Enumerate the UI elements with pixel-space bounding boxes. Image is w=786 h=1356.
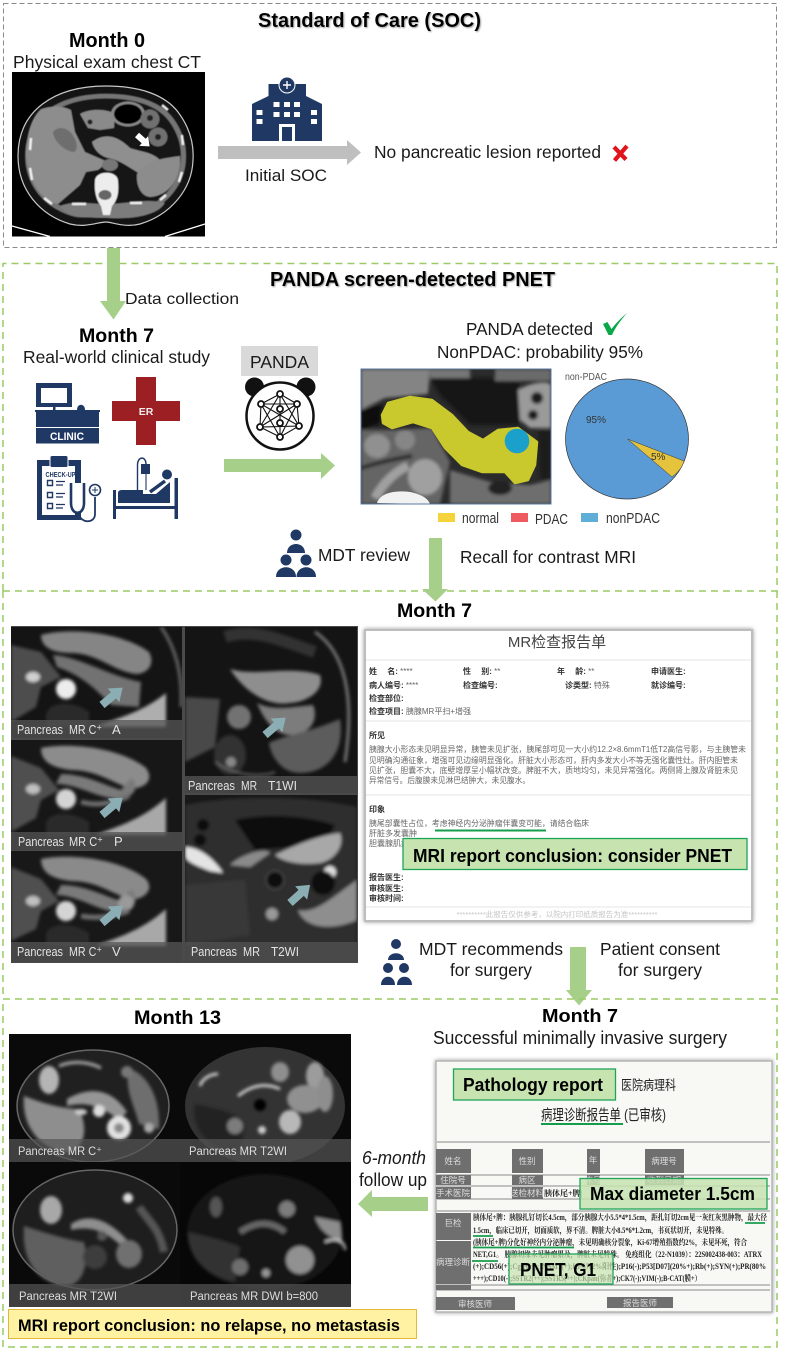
arrow: to surgery [566,947,592,1006]
table: patient info: 病理号 [651,1156,677,1166]
image: MRI T1WI: Pancreas [188,778,235,793]
arrow: to PANDA result [224,453,335,479]
heading: month 7: Month 7 [79,325,154,347]
report: MR report sheet: 胰腺大小形态未见明显异常，胰管未见扩张，胰尾部可见一大小约12.2×8.6mmT1低T2高信号影，与主胰管未 [369,744,746,754]
table: patient info: 巨检 [444,1218,462,1228]
text: physical exam chest CT: Physical exam chest CT [13,52,201,72]
report: MR report sheet: 见明确沟通征象，增强可见边缘明显强化。肝脏大小形态可，肝内多发大小不等无强化囊性灶。肝内胆管未 [369,755,738,765]
report: MR report sheet: MR检查报告单 [508,634,606,651]
legend: segmentation classes: PDAC [535,512,568,528]
text: patient consent for surgery: Patient consent [600,939,720,959]
callout: pathology report: Pathology report [463,1075,603,1095]
report: MR report sheet: 申请医生: [651,666,686,676]
image: follow-up MR T2WI top: Pancreas MR T2WI [189,1146,287,1158]
image: MRI portal phase [11,740,182,849]
text: initial SOC: Initial SOC [245,167,327,185]
image: MRI T1WI [185,627,357,793]
image: follow-up MR contrast [9,1049,180,1162]
image: MRI T1WI: T1WI [268,778,297,793]
callout: PNET G1 [509,1254,613,1284]
callout: pathology report [454,1069,616,1100]
report: MR report sheet: 胆囊腺肌症可能大 [369,838,433,848]
icon: MDT team recommends [381,939,412,985]
image: MRI T2WI [185,795,357,959]
image: segmented CT [361,369,551,504]
image: MRI portal phase: MR C⁺ [69,834,103,849]
callout: consider PNET: MRI report conclusion: consider PNET [413,846,732,866]
table: patient info [436,1142,770,1310]
callout: PNET G1: PNET, G1 [520,1260,596,1280]
callout: no relapse no metastasis [8,1310,416,1338]
image: MRI T2WI: MR [243,944,260,959]
icon: green check [603,313,627,335]
chart: probability pie: non-PDAC [565,372,607,383]
report: pathology report [436,1061,772,1312]
arrow: follow up [358,1190,428,1217]
table: patient info: 审核医师 [458,1299,492,1309]
chart: probability pie: 5% [651,452,666,463]
text: recall for contrast MRI: Recall for contrast MRI [460,547,636,567]
text: pathology body: +++);CD10(-);SSTR2(++);SSTR5(++);CKpan(弥者+);CK7(-);VIM(-);B-CAT(膜+） [473,1273,701,1283]
icon: check-up clipboard: CHECK-UP [46,472,76,479]
legend: segmentation classes: normal [462,511,499,527]
icon: clinic [35,383,100,444]
text: pathology body: 1.5cm，临床已切开，切面质软，界不清。脾脏大小8.5*6*1.2cm，书页状切开，未见特殊。 [473,1225,728,1236]
heading: PANDA screen-detected PNET: PANDA screen-detected PNET [270,268,555,291]
text: MDT recommends for surgery: for surgery [450,960,532,980]
panel: standard of care [4,4,776,248]
report: MR report sheet: 见扩张，胆囊不大，底壁增厚呈小幅状改变。脾脏不大，质地均匀，未见异常强化。两侧肾上腺及肾脏未见 [369,765,738,775]
panel: PANDA screen-detected PNET [3,248,777,999]
text: pathology body [472,1212,768,1283]
report: MR report sheet: 检查编号: [463,680,498,690]
icon: emergency room cross: ER [139,406,154,418]
table: patient info: 胰体尾+脾| [544,1188,583,1198]
text: no pancreatic lesion reported: No pancreatic lesion reported [374,142,601,162]
text: department: 医院病理科 [621,1078,676,1093]
report: MR report sheet: 检查项目: 胰腺MR平扫+增强 [369,706,471,716]
report: MR report sheet: 审核医生: [369,883,404,893]
text: MDT review: MDT review [318,545,410,565]
report: MR report sheet: 诊类型: 特殊 [565,680,610,690]
heading: month 0: Month 0 [69,30,145,52]
text: successful surgery: Successful minimally invasive surgery [433,1028,727,1048]
text: six month follow up [359,1148,427,1190]
text: real-world clinical study: Real-world clinical study [23,347,210,367]
icon: hospital [252,77,322,141]
callout: consider PNET [403,838,747,870]
label: PANDA model [241,346,318,376]
text: patient consent for surgery [600,939,720,980]
image: follow-up MR DWI: Pancreas MR DWI b=800 [190,1291,318,1303]
panel: month 7 MRI [11,601,752,1006]
report: MR report sheet: **********此报告仅供参考，以院内打印纸质报告为准********** [457,909,658,919]
arrow: recall [422,538,448,602]
report: MR report sheet: 姓 名: **** [369,666,413,676]
table: patient info: 病区 [518,1175,536,1185]
arrow: data collection [100,248,126,320]
chart: probability pie [565,372,688,499]
report: MR report sheet: 审核时间: [369,893,404,903]
icon: clinic: CLINIC [50,431,84,443]
heading: month 13: Month 13 [134,1008,221,1029]
chart: probability pie: 95% [586,415,606,426]
image: MRI portal phase: Pancreas [18,834,64,849]
image: follow-up MRI grid [9,1034,351,1307]
image: MRI arterial phase: A [112,722,121,737]
image: MRI arterial phase [11,627,182,737]
icon: emergency room cross [112,377,180,445]
legend: segmentation classes [438,511,660,528]
callout: max diameter: Max diameter 1.5cm [590,1184,755,1204]
table: patient info: 住院号 [440,1175,466,1185]
report: MR report sheet: 所见 [369,730,385,740]
table: patient info: 收到日期 [647,1175,681,1185]
text: MDT recommends for surgery [419,939,563,980]
image: follow-up MR contrast: Pancreas MR C⁺ [18,1146,102,1158]
icon: check-up clipboard [37,456,100,521]
report: MR report sheet: 病人编号: **** [369,680,418,690]
callout: no relapse no metastasis: MRI report conclusion: no relapse, no metastasis [18,1316,400,1335]
panel: surgery and follow-up [3,999,777,1347]
report: MR report sheet: 性 别: ** [463,666,500,676]
report: MR report sheet [365,630,752,921]
text: MDT recommends for surgery: MDT recommends [419,939,563,959]
report: MR report sheet: 肝脏多发囊肿 [369,828,417,838]
image: MRI arterial phase: MR C⁺ [69,722,102,737]
report: MR report sheet: 检查部位: [369,693,404,703]
image: MRI T2WI: Pancreas [191,944,237,959]
table: patient info: 报告医师 [623,1298,657,1308]
text: patient consent for surgery: for surgery [618,960,702,980]
icon: hospital bed [113,458,178,519]
text: report title: 病理诊断报告单 (已审核) [541,1107,666,1124]
table: patient info: 病理诊断 [436,1257,470,1267]
image: follow-up MR T2WI bottom: Pancreas MR T2WI [19,1291,117,1303]
heading: month 7 surgery: Month 7 [542,1006,618,1026]
image: MRI venous phase: MR C⁺ [69,944,102,959]
text: six month follow up: follow up [359,1170,427,1190]
image: MRI venous phase [11,851,182,959]
image: MRI portal phase: P [114,834,123,849]
image: chest CT scan [12,72,205,236]
text: six month follow up: 6-month [362,1148,426,1168]
arrow: initial SOC [218,140,361,165]
heading: Standard of Care: Standard of Care (SOC) [258,9,481,32]
label: PANDA model: PANDA [250,352,309,372]
table: patient info: 年 [589,1155,598,1165]
report: MR report sheet: 胰尾部囊性占位，考虑神经内分泌肿瘤伴囊变可能，请结合临床 [369,818,589,828]
icon: panda neural network [245,378,316,450]
image: MRI T2WI: T2WI [271,944,299,959]
image: follow-up MR DWI [180,1175,351,1307]
report: MR report sheet: 印象 [369,804,385,814]
table: patient info: 送检材料 [510,1188,544,1198]
text: NonPDAC probability: NonPDAC: probability 95% [437,342,643,362]
callout: max diameter [580,1178,767,1209]
image: follow-up MR T2WI top [180,1047,351,1162]
legend: segmentation classes: nonPDAC [606,511,660,527]
table: patient info: 床号 [584,1175,602,1185]
report: MR report sheet: 就诊编号: [651,680,686,690]
image: contrast MRI grid [11,626,358,963]
report: MR report sheet: 异常信号。后腹膜未见淋巴结肿大，未见腹水。 [369,775,530,785]
report: MR report sheet: 报告医生: [369,872,404,882]
image: MRI venous phase: V [112,944,121,959]
report: MR report sheet: 年 龄: ** [557,666,594,676]
icon: MDT team [276,530,316,577]
image: MRI venous phase: Pancreas [17,944,63,959]
icon: red cross [614,146,627,160]
text: data collection: Data collection [125,291,239,308]
image: follow-up MR T2WI bottom [9,1169,180,1307]
table: patient info: 姓名 [444,1156,462,1166]
heading: month 7 MRI: Month 7 [397,601,472,622]
table: patient info: 性别 [518,1156,536,1166]
image: MRI T1WI: MR [241,778,257,793]
table: patient info: 手术医院 [436,1188,470,1198]
text: PANDA detected: PANDA detected [466,319,593,339]
image: MRI arterial phase: Pancreas [17,722,63,737]
